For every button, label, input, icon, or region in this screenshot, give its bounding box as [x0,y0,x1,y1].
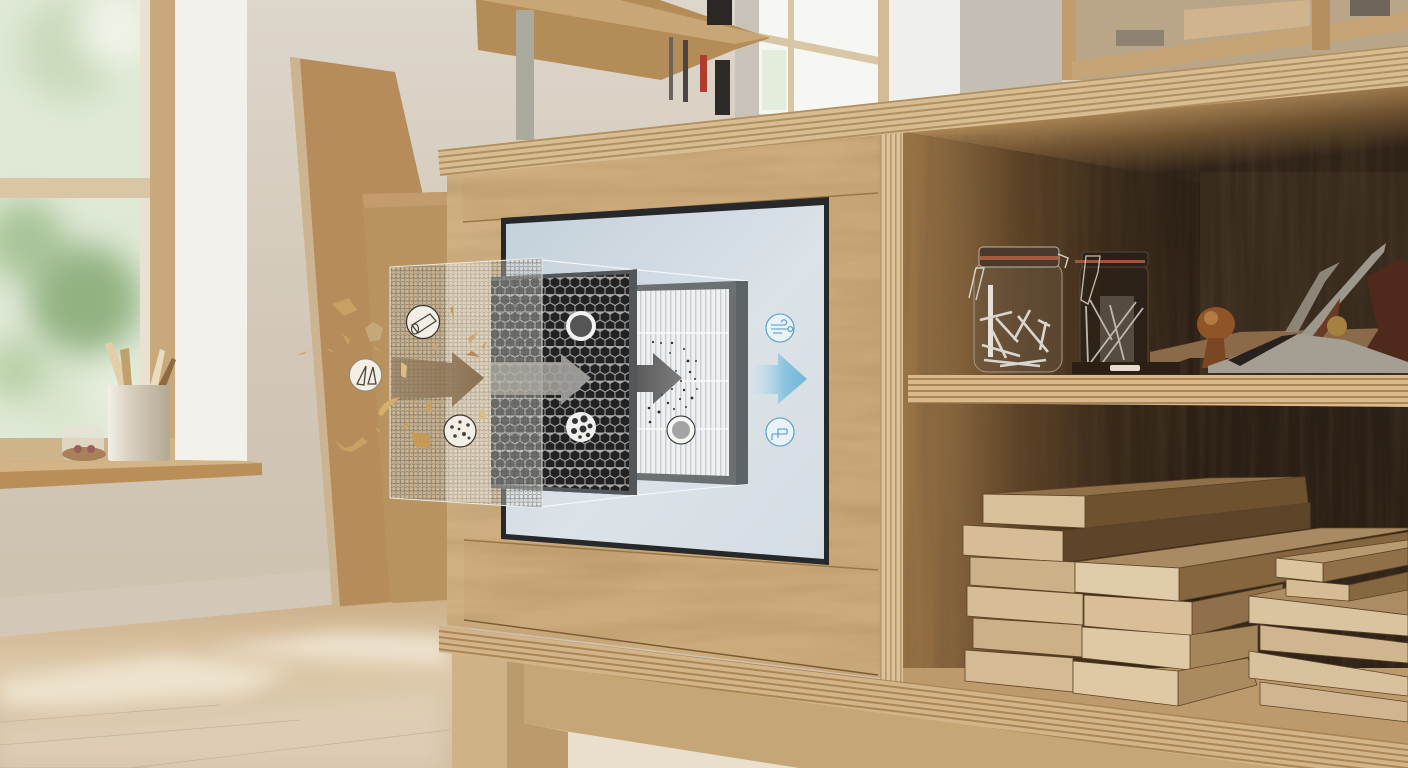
arrow: clean air [750,353,807,404]
pale wall panel [889,0,960,104]
upper background shelves [1062,0,1408,80]
wood chips flying [296,298,486,452]
icon: wood shavings [350,359,382,391]
pale floor under cabinet [520,720,1280,768]
arrow: partly filtered air [490,354,591,405]
grey wall panel [960,0,1062,100]
pen cup with tools [105,342,176,461]
filter layer 2: activated carbon honeycomb [491,269,637,495]
glass jar with nails [1075,252,1148,372]
lumber stack: middle [1073,528,1408,706]
cabinet front face [447,130,880,678]
fine dust particles [648,341,698,423]
icon: fresh air lower [766,418,794,446]
window reveal [175,0,247,462]
window frame base [0,438,175,464]
bottom shelf surface [903,668,1408,745]
icon: coarse particles [566,412,596,442]
cabinet top slab edge [438,45,1408,176]
projection lines [541,260,748,507]
lumber stack: left [963,477,1310,692]
icon: wood log [406,306,440,338]
leaning wood board, large [290,57,423,607]
wall shelf with hanging tools [476,0,770,140]
glass jar with screws [969,247,1068,372]
window with garden view [0,0,175,440]
leaning wood board, small [362,192,447,603]
arrow: dusty air [392,352,484,407]
icon: fresh air upper [766,314,794,342]
lid and peg on shelf [1072,362,1180,374]
floor [0,598,470,768]
middle shelf [908,375,1408,407]
window sill [0,460,262,489]
small jar on sill [62,425,106,461]
arrow: filtered air [637,353,682,404]
wood behind plane [1150,328,1392,372]
bottom cabinet slab edge [439,626,1408,768]
filter layer 3: HEPA pleats [637,281,748,485]
cabinet apron [505,658,1408,768]
lumber stack: right [1249,540,1408,722]
cabinet side post [880,132,903,682]
hand plane [1197,243,1408,373]
filter layer 1: translucent mesh [390,258,542,508]
icon: fine carbon mesh [566,311,596,341]
rear wall beside window [735,0,760,118]
baseboard [0,570,330,637]
icon: sawdust fragments [444,415,476,447]
icon: ultrafine particles [667,416,695,444]
rear window [759,0,889,114]
screen panel [501,197,829,565]
cabinet interior compartment [900,86,1408,687]
cabinet leg [452,650,568,768]
